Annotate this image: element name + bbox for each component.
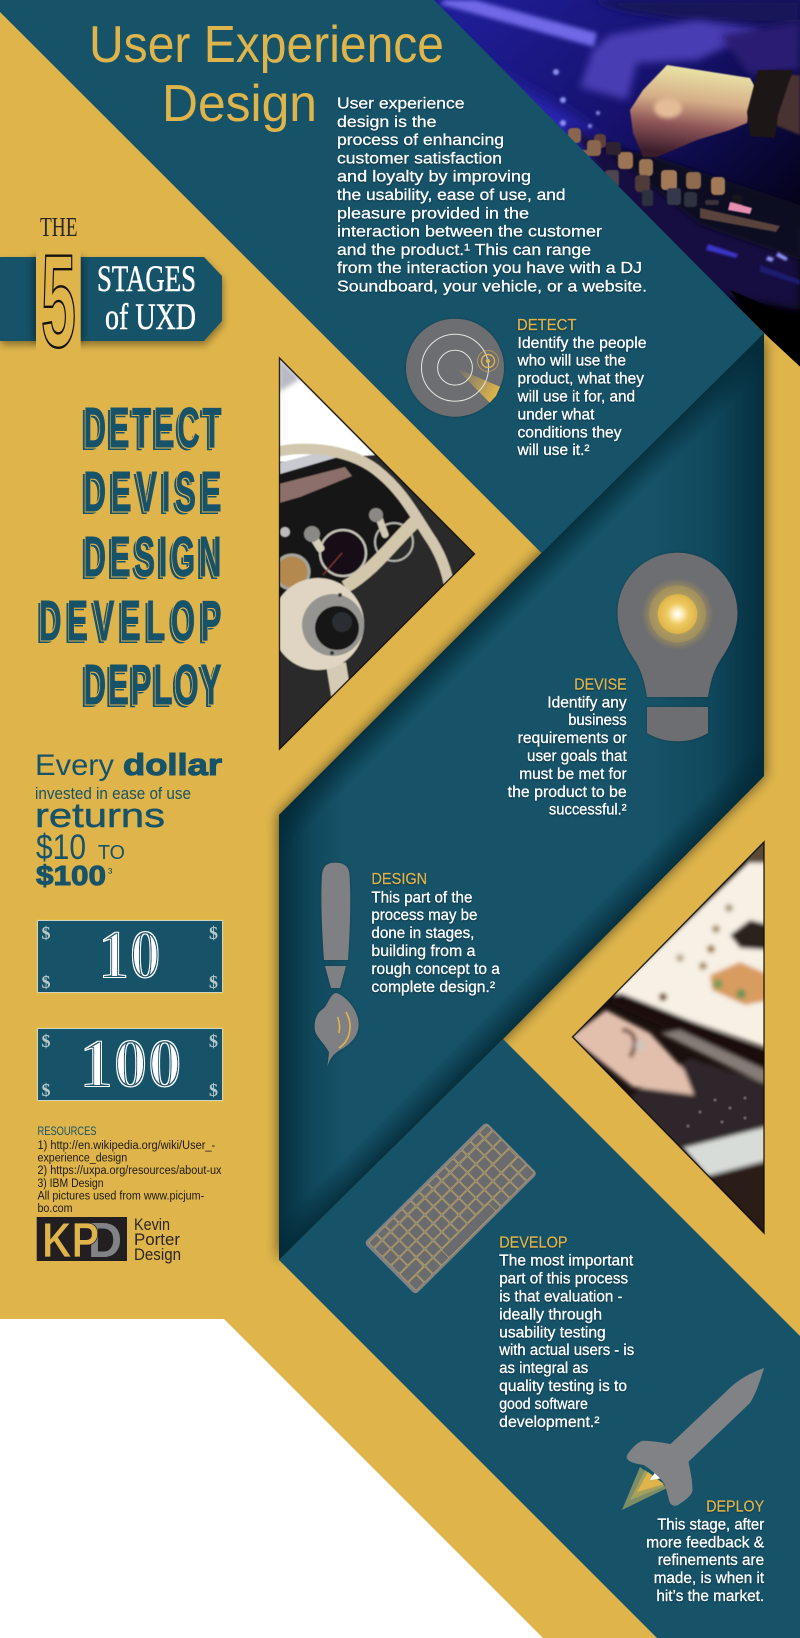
text block: devise <box>508 676 627 819</box>
text block: design: rough concept to a <box>371 961 500 978</box>
panel: detect top panel <box>0 0 764 553</box>
text block: intro: User experience <box>337 96 465 112</box>
title <box>89 16 444 133</box>
text block: design: This part of the <box>371 889 472 906</box>
text block: devise: business <box>568 712 627 729</box>
text block: devise: DEVISE <box>574 676 627 693</box>
panel: devise and design folded band <box>279 333 764 1260</box>
text block: intro: from the interaction you have with a DJ <box>337 260 642 277</box>
bill: ten dollars: $ <box>209 972 218 992</box>
stat: every dollar returns: TO <box>98 842 125 864</box>
list: five stages <box>39 395 222 716</box>
text block: intro: process of enhancing <box>337 132 504 149</box>
text block: detect: Identify the people <box>518 335 646 352</box>
bill: hundred dollars: $ <box>42 1031 50 1051</box>
icon: radar <box>406 319 504 417</box>
badge: the 5 stages of UXD <box>0 212 222 374</box>
text block: intro: interaction between the customer <box>337 224 603 241</box>
photo: hand on laptop <box>570 835 775 1240</box>
stages text: STAGES <box>97 259 196 300</box>
text block: detect <box>517 317 646 459</box>
logo: Kevin Porter Design <box>37 1214 181 1268</box>
bill: ten dollars: $ <box>42 923 50 943</box>
text block: develop: usability testing <box>499 1324 606 1341</box>
stat: every dollar returns: ³ <box>108 865 113 880</box>
text block: intro: and the product.¹ This can range <box>337 242 591 259</box>
bill: hundred dollars: $ <box>209 1031 218 1051</box>
text block: resources: bo.com <box>38 1203 72 1215</box>
text block: devise: Identify any <box>547 694 627 711</box>
photo: vintage car steering wheel <box>272 355 480 755</box>
text block: intro: and loyalty by improving <box>337 169 531 186</box>
stat: every dollar returns: dollar <box>123 747 222 782</box>
text block: deploy: more feedback & <box>646 1534 765 1551</box>
text block: resources: 2) https://uxpa.org/resources/about-ux <box>38 1165 222 1177</box>
list: five stages: DESIGN <box>84 524 222 588</box>
text block: resources: 3) IBM Design <box>38 1178 104 1190</box>
text block: detect: will use it for, and <box>517 388 635 406</box>
bill: ten dollars: $ <box>209 923 218 943</box>
text block: design: complete design.² <box>371 979 495 996</box>
text block: develop: ideally through <box>499 1306 602 1323</box>
text block: devise: the product to be <box>508 784 627 801</box>
stat: every dollar returns: Every <box>35 749 114 782</box>
logo: Kevin Porter Design: Porter <box>134 1230 180 1249</box>
text block: intro: Soundboard, your vehicle, or a website. <box>337 278 647 296</box>
text block: devise: requirements or <box>518 730 627 747</box>
text block: deploy <box>646 1499 765 1605</box>
text block: develop: with actual users - is <box>498 1342 634 1359</box>
bill: hundred dollars <box>36 1026 224 1103</box>
text block: intro: customer satisfaction <box>337 150 502 167</box>
text block: develop: part of this process <box>499 1271 628 1288</box>
text block: design: done in stages, <box>371 925 474 942</box>
text block: devise: successful.² <box>549 802 627 819</box>
text block: resources: RESOURCES <box>38 1124 96 1138</box>
photo: DJ soundboard <box>430 0 800 370</box>
text block: resources: 1) http://en.wikipedia.org/wiki/User_- <box>38 1140 215 1152</box>
stat: every dollar returns <box>35 747 222 891</box>
text block: detect: conditions they <box>518 424 622 441</box>
stat: every dollar returns: returns <box>35 797 165 835</box>
text block: deploy: refinements are <box>658 1552 764 1569</box>
text block: intro: the usability, ease of use, and <box>337 187 566 204</box>
logo: Kevin Porter Design: Design <box>134 1245 181 1264</box>
photo edges <box>280 358 764 1233</box>
logo: Kevin Porter Design: D <box>88 1214 122 1268</box>
list: five stages: DEVELOP <box>39 588 222 652</box>
text block: resources: experience_design <box>38 1153 127 1165</box>
of UXD text: of UXD <box>105 297 196 338</box>
title: User Experience <box>89 16 444 74</box>
icon: paint brush <box>315 863 359 1067</box>
text block: detect: product, what they <box>518 371 644 388</box>
text block: intro: pleasure provided in the <box>337 205 529 222</box>
bill: hundred dollars: 100 <box>79 1026 182 1103</box>
icon: light bulb <box>618 553 738 741</box>
stat: every dollar returns: invested in ease of use <box>35 785 191 803</box>
logo: Kevin Porter Design: Kevin <box>134 1215 170 1234</box>
text block: develop: development.² <box>499 1414 600 1431</box>
text block: devise: must be met for <box>519 766 627 783</box>
text block: design <box>371 871 500 996</box>
text block: deploy: hit’s the market. <box>656 1588 764 1605</box>
title: Design <box>162 75 317 133</box>
text block: deploy: made, is when it <box>654 1570 765 1587</box>
text block: develop: quality testing is to <box>499 1378 627 1395</box>
bill: ten dollars: $ <box>42 972 50 992</box>
bill: hundred dollars: $ <box>42 1080 50 1100</box>
text block: design: building from a <box>371 943 476 960</box>
text block: design: DESIGN <box>371 871 427 888</box>
icon: keyboard <box>364 1122 537 1295</box>
text block: develop: The most important <box>499 1253 634 1270</box>
list: five stages: DEPLOY <box>84 652 222 716</box>
list: five stages: DETECT <box>84 395 222 459</box>
text block: develop: is that evaluation - <box>499 1288 623 1306</box>
stat: every dollar returns: $100 <box>36 860 106 891</box>
background: white lower-left corner <box>0 1319 543 1638</box>
text block: deploy: DEPLOY <box>706 1499 764 1516</box>
text block: develop: good software <box>499 1396 588 1413</box>
text block: intro <box>337 96 647 296</box>
panel: develop and deploy lower panel <box>279 1039 800 1638</box>
bill: ten dollars <box>36 917 224 994</box>
text block: develop <box>498 1235 634 1431</box>
text block: detect: will use it.² <box>517 442 590 459</box>
bill: hundred dollars: $ <box>209 1080 218 1100</box>
text block: devise: user goals that <box>527 748 627 765</box>
text block: develop: as integral as <box>499 1360 588 1377</box>
text block: detect: DETECT <box>517 317 577 334</box>
stat: every dollar returns: $10 <box>36 828 86 867</box>
gold strip with shadow <box>33 243 83 360</box>
text block: develop: DEVELOP <box>499 1235 568 1252</box>
heading: the: THE <box>40 212 78 242</box>
text block: intro: design is the <box>337 114 437 131</box>
text block: resources <box>38 1124 222 1215</box>
badge: the 5 stages of UXD: 5 <box>41 228 76 374</box>
icon: rocket <box>622 1368 764 1510</box>
list: five stages: DEVISE <box>84 459 222 523</box>
bill: ten dollars: 10 <box>98 917 161 994</box>
ribbon <box>0 257 222 341</box>
text block: resources: All pictures used from www.picjum- <box>38 1190 204 1202</box>
text block: deploy: This stage, after <box>657 1516 764 1533</box>
text block: detect: who will use the <box>517 353 626 370</box>
text block: detect: under what <box>518 406 595 423</box>
text block: design: process may be <box>371 907 477 924</box>
logo: Kevin Porter Design: KP <box>42 1214 99 1268</box>
